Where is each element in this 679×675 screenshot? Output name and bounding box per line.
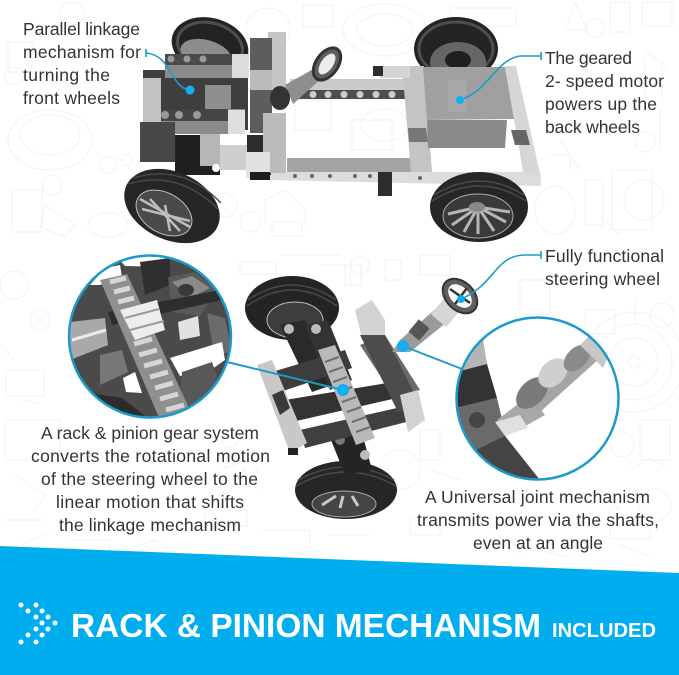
leader: steering wheel callout [457,251,541,303]
panel: full car chassis illustration [112,9,541,257]
text: universal joint description: A Universal joint mechanism [425,487,650,507]
text: steering wheel callout: Fully functional [545,246,664,266]
text: steering wheel callout [545,246,664,289]
icon: bottom wheel [295,461,397,519]
text: steering wheel callout: steering wheel [545,269,660,289]
icon: front far wheel [165,9,255,83]
text: rack and pinion description: linear motion that shifts [56,492,244,512]
inset: universal joint close-up [456,318,618,480]
banner title: RACK & PINION MECHANISM [71,607,541,644]
text: geared motor callout: powers up the [545,94,657,114]
text: geared motor callout: The geared [545,48,632,68]
text: rack and pinion description [31,423,270,535]
inset: rack and pinion close-up [65,255,235,420]
text: rack and pinion description: converts the rotational motion [31,446,270,466]
text: geared motor callout: 2- speed motor [545,71,664,91]
banner: blue footer [0,546,679,675]
leader: rack to inset [227,362,349,396]
front assembly [140,32,286,180]
text: universal joint description [417,487,659,553]
linkage arms [280,320,372,475]
icon: front near wheel [112,155,232,257]
text: rack and pinion description: A rack & pinion gear system [41,423,259,443]
banner subtitle: INCLUDED [552,620,656,642]
icon: steering shaft and wheel [270,43,346,110]
left bracket [257,360,307,455]
text: rack and pinion description: of the steering wheel to the [41,469,258,489]
text: universal joint description: transmits power via the shafts, [417,510,659,530]
text: rack and pinion description: the linkage mechanism [59,515,241,535]
icon: motor box [423,67,514,148]
chassis lower rail [270,158,541,196]
text: geared motor callout [545,48,664,137]
text: parallel linkage callout: turning the [23,65,110,85]
icon: steering shaft and wheel [392,272,484,352]
text: geared motor callout: back wheels [545,117,640,137]
text: parallel linkage callout: Parallel linkage [23,19,140,39]
rear frame [373,66,541,178]
leader: motor callout [456,52,541,104]
text: parallel linkage callout: mechanism for [23,42,141,62]
text: parallel linkage callout: front wheels [23,88,120,108]
right bracket [355,300,425,432]
icon: rear near wheel [430,172,528,242]
text: parallel linkage callout [23,19,141,108]
text: universal joint description: even at an angle [473,533,603,553]
cross shafts [272,335,420,448]
icon: top wheel [245,276,339,340]
leader: linkage callout [146,49,194,94]
leader: universal joint to inset [397,340,462,369]
chassis upper rail [290,79,405,99]
icon: rear far wheel [414,17,498,82]
icon: rack gear [318,345,375,445]
icon: dotted chevron logo [18,602,58,644]
panel: front steering assembly illustration [245,251,541,519]
